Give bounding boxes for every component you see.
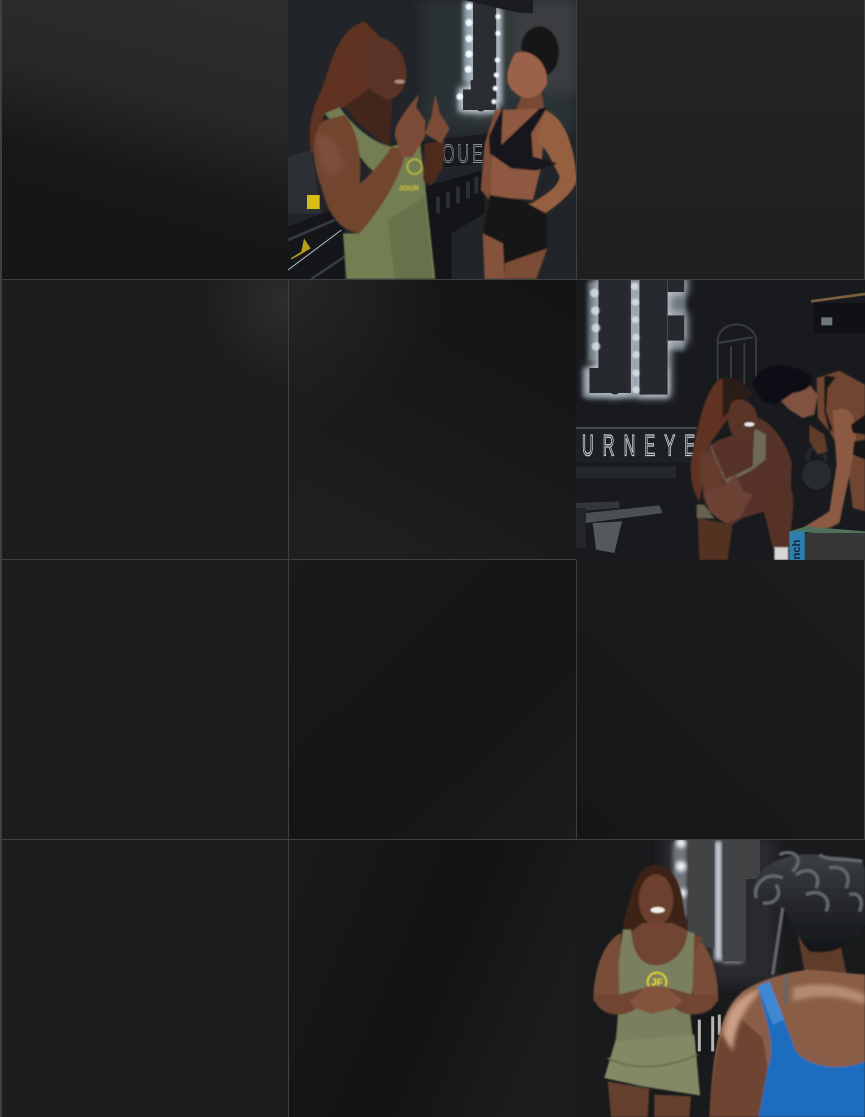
- lettered sign band: [576, 427, 697, 456]
- sign letter F: F: [638, 248, 662, 430]
- weights row: [576, 466, 676, 478]
- photo: two women training with kettlebell: [576, 280, 865, 560]
- lettered sign fragment: [698, 1014, 721, 1052]
- panel: row 2 left dark tile: [2, 280, 288, 559]
- sign letter J: J: [603, 249, 629, 428]
- sign lights: [676, 838, 687, 897]
- lettered sign band: [423, 133, 488, 168]
- bench: [576, 501, 663, 553]
- shirt logo: [399, 159, 422, 193]
- sign lights: [590, 283, 640, 393]
- plyo box: [789, 526, 865, 561]
- shirt logo: JOUR: [399, 184, 420, 193]
- lettered sign band: URNEYE: [582, 431, 704, 463]
- clasped hands: [629, 986, 683, 1014]
- sign letter F: F: [721, 809, 744, 999]
- photo: two women talking in front of JF sign: [288, 0, 578, 279]
- smiling woman in olive dress: [594, 865, 718, 1117]
- panel: row 3 right dark tile: [577, 560, 864, 839]
- sign letter J: J: [691, 808, 713, 982]
- gym rack: [718, 325, 756, 385]
- photo: smiling woman seen over another woman's shoulder: [576, 840, 865, 1117]
- woman leaning forward: [753, 365, 865, 531]
- weights rack: [425, 170, 485, 279]
- gym shelf top: [465, 0, 533, 13]
- woman from behind in blue top: [709, 853, 865, 1117]
- sign lights: [456, 3, 501, 104]
- dress logo: JF: [651, 978, 663, 989]
- panel: row 2 centre dark tile: [289, 280, 576, 559]
- sign letter F: [638, 248, 684, 430]
- panel: top left dark tile: [2, 0, 288, 279]
- forearms: [594, 988, 648, 1015]
- sign light strips: [583, 281, 686, 398]
- gym bench lower left: [288, 150, 345, 279]
- panel: row 4 left dark tile: [2, 840, 288, 1117]
- woman seated smiling: [691, 378, 793, 560]
- lettered sign band: OUE: [442, 138, 486, 168]
- panel: row 3 centre dark tile: [289, 560, 576, 839]
- plyo box: nch: [791, 539, 803, 560]
- sign letter F: [722, 840, 760, 962]
- sign letter J: [688, 840, 714, 948]
- sign light strips: [673, 841, 743, 963]
- woman in black sports bra: [481, 26, 577, 279]
- shelf: [811, 294, 865, 333]
- sign letter J: [589, 249, 631, 428]
- kettlebell: [802, 448, 831, 489]
- sign light strips: [458, 2, 502, 112]
- panel: top right dark tile: [577, 0, 864, 279]
- panel: row 4 centre dark tile: [289, 840, 576, 1117]
- dress logo: [648, 973, 666, 991]
- panel: row 3 left dark tile: [2, 560, 288, 839]
- woman in olive top: [310, 22, 450, 279]
